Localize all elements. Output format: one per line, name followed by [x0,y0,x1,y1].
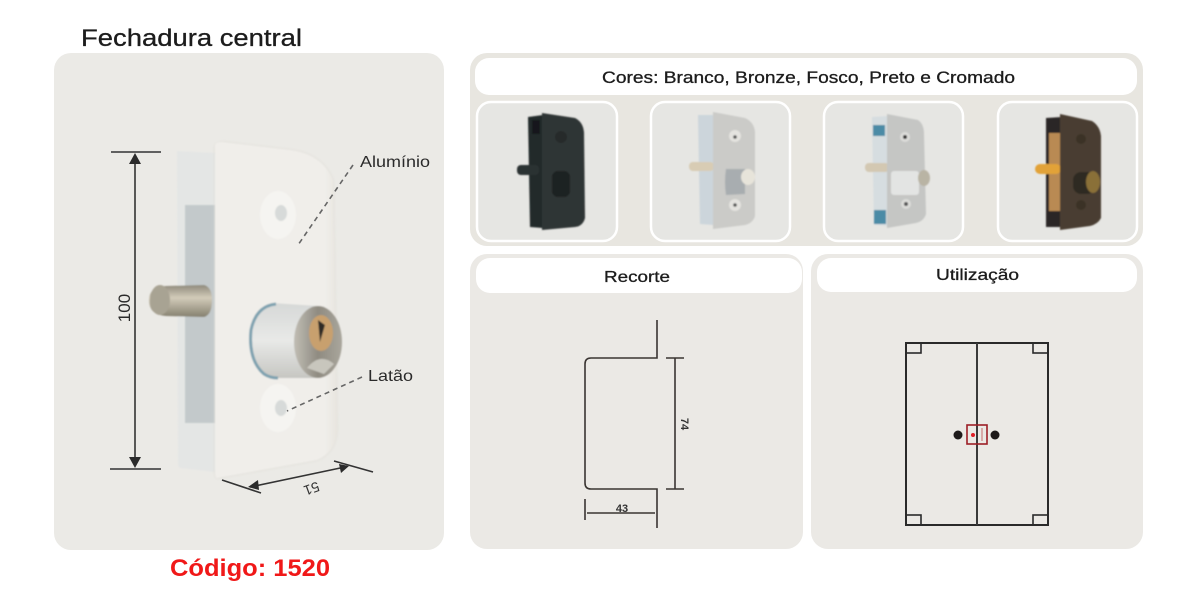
label: Latão with leader: Latão [368,368,413,385]
thumbnail: black lock [477,102,617,241]
heading: usage: Utilização [936,267,1019,284]
dimension: width 51: 51 [301,479,322,499]
diagram: cut-out profile [585,320,690,528]
panel: colours [470,53,1143,246]
heading: colours: Cores: Branco, Bronze, Fosco, Preto e Cromado [602,69,1015,87]
thumbnail: chrome lock [824,102,963,241]
label: Alumínio with leader [298,154,430,245]
thumbnail: bronze lock [998,102,1137,241]
dimension: height 100: 100 [115,294,134,322]
diagram: double glass door [906,343,1048,525]
label: Latão with leader [287,368,413,411]
panel: cut-out [470,254,803,549]
heading: usage [817,258,1137,292]
dimension: height 100 [110,152,161,469]
panel: main product photo [54,53,444,550]
heading: cut-out: Recorte [604,269,670,286]
dimension label: 43: 43 [616,503,628,515]
title: Fechadura central [81,25,302,52]
dimension: width 51 [222,461,373,499]
panel: usage [811,254,1143,549]
dimension label: 74: 74 [678,418,690,431]
heading: colours [475,58,1137,95]
label: Alumínio with leader: Alumínio [360,154,430,171]
heading: cut-out [476,258,802,293]
thumbnail: white lock [651,102,790,241]
code label: Código: 1520 [170,555,330,582]
icon: lock illustration [149,142,342,478]
